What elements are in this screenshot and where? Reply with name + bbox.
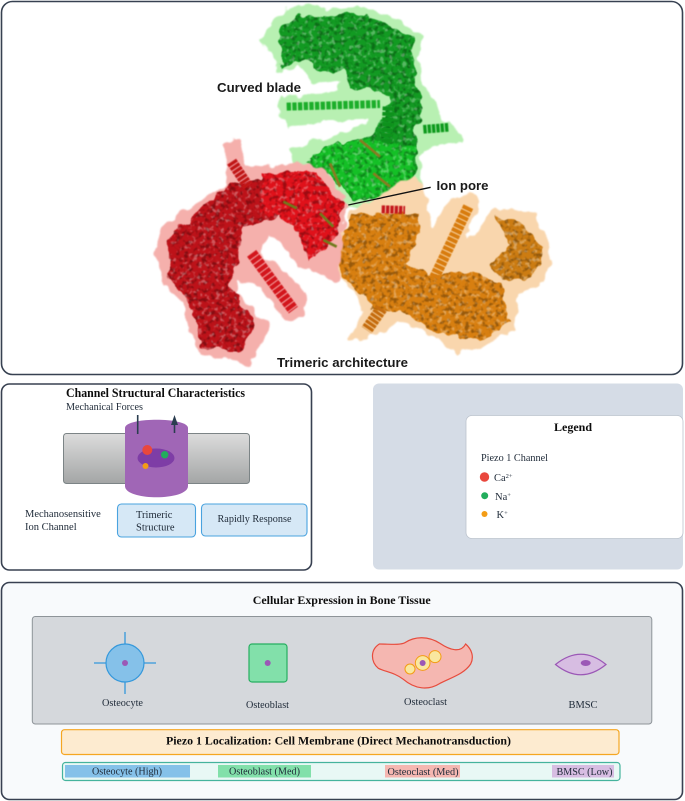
cell: osteoblast xyxy=(246,644,289,711)
protein trimer model xyxy=(157,7,550,363)
localization banner xyxy=(62,730,619,754)
legend heading: Legend xyxy=(554,420,592,434)
label: mechanical forces: Mechanical Forces xyxy=(66,402,143,413)
legend item: sodium: Na xyxy=(495,492,507,503)
cell: osteoclast xyxy=(372,638,472,708)
legend title: Piezo 1 Channel xyxy=(481,453,548,464)
panel: protein structure xyxy=(2,2,682,374)
box: rapidly response xyxy=(202,504,307,536)
level: osteocyte high: Osteocyte (High) xyxy=(92,766,162,778)
box: trimeric structure: Structure xyxy=(136,522,175,534)
legend item: potassium: + xyxy=(504,510,508,517)
localization banner: Piezo 1 Localization: Cell Membrane (Direct Mechanotransduction) xyxy=(166,734,511,748)
panel: legend background xyxy=(373,384,683,570)
channel cylinder xyxy=(125,420,188,497)
panel: channel structural characteristics xyxy=(2,384,312,570)
force arrow: up xyxy=(171,415,178,433)
expression level bar xyxy=(62,762,620,780)
cell: BMSC xyxy=(556,654,606,711)
red subunit ribbons xyxy=(167,162,405,352)
box: trimeric structure xyxy=(118,504,196,537)
label: trimeric architecture: Trimeric architecture xyxy=(277,356,408,370)
level: osteoblast med: Osteoblast (Med) xyxy=(229,766,300,778)
level: osteoblast med xyxy=(218,765,311,778)
cell: osteocyte xyxy=(94,632,156,709)
cell panel background xyxy=(32,616,652,724)
legend item: calcium xyxy=(480,472,513,484)
legend card xyxy=(466,416,683,538)
label: mechanosensitive ion channel: Ion Channel xyxy=(25,522,77,533)
level: BMSC low: BMSC (Low) xyxy=(556,767,613,778)
cell: osteocyte: Osteocyte xyxy=(102,698,143,709)
cell: osteoclast: Osteoclast xyxy=(404,697,447,708)
ion: calcium xyxy=(142,445,152,455)
level: osteoclast med: Osteoclast (Med) xyxy=(388,767,459,778)
level: osteocyte high xyxy=(65,765,190,778)
membrane bar xyxy=(64,434,250,484)
label: ion pore: Ion pore xyxy=(436,179,489,193)
cell: BMSC: BMSC xyxy=(568,700,598,711)
heading: Cellular Expression in Bone Tissue xyxy=(253,593,431,607)
ion: sodium xyxy=(161,451,168,458)
orange subunit surface xyxy=(332,178,550,352)
box: trimeric structure: Trimeric xyxy=(136,510,173,521)
force arrow: down xyxy=(137,415,139,434)
box: rapidly response: Rapidly Response xyxy=(218,514,292,525)
legend item: potassium xyxy=(482,510,508,521)
legend item: sodium xyxy=(481,492,511,503)
cell: osteoblast: Osteoblast xyxy=(246,700,289,711)
ion: potassium xyxy=(142,463,148,469)
red subunit surface xyxy=(157,142,345,363)
legend item: calcium: 2+ xyxy=(506,473,513,480)
heading: Channel Structural Characteristics xyxy=(66,386,245,400)
green subunit surface xyxy=(262,7,462,205)
legend item: calcium: Ca xyxy=(494,473,506,484)
green subunit ribbons xyxy=(278,13,448,200)
panel: cellular expression xyxy=(2,582,682,800)
orange subunit ribbons xyxy=(335,207,543,340)
pore leader line xyxy=(348,187,431,205)
label: curved blade: Curved blade xyxy=(217,80,301,95)
legend item: sodium: + xyxy=(507,492,511,499)
legend item: potassium: K xyxy=(496,510,504,521)
label: mechanosensitive ion channel: Mechanosensitive xyxy=(25,509,101,520)
